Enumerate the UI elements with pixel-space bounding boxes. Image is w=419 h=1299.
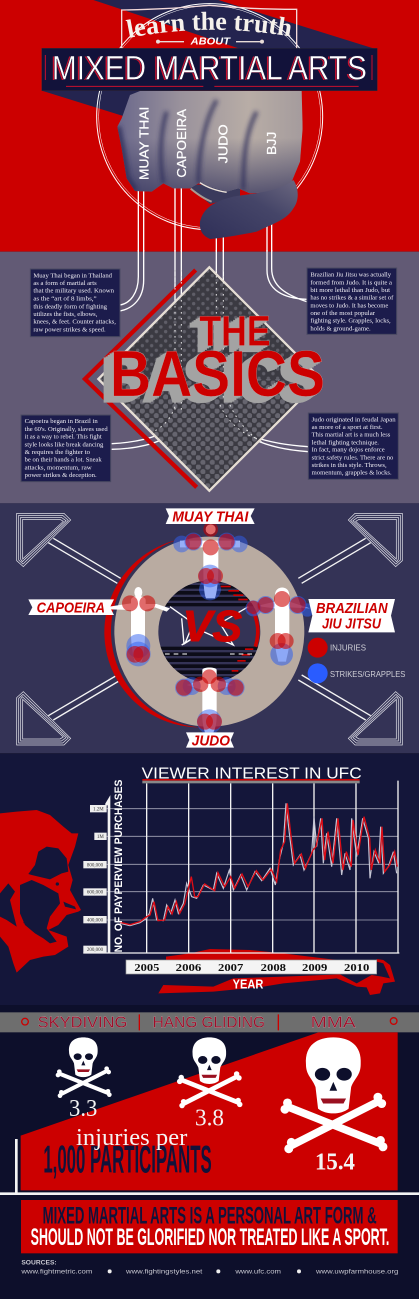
- label: brazilian jiu jitsu: JIU JITSU: [322, 617, 381, 633]
- tagline: learn the truth: [126, 12, 290, 38]
- text block: brazilian jiu jitsu: Brazilian Jiu Jitsu was actually: [310, 272, 392, 279]
- text block: brazilian jiu jitsu: has no strikes & a similar set of: [310, 295, 394, 302]
- x axis years: 2009: [302, 963, 327, 974]
- y axis ticks: 1.2M: [93, 807, 104, 812]
- red streak: [158, 949, 395, 995]
- sources: www.ufc.com: [234, 1269, 281, 1276]
- values: 3.8: [195, 1106, 224, 1132]
- diagonal navy band: [42, 0, 377, 132]
- heading: the: THE: [199, 307, 271, 355]
- sources: www.fightingstyles.net: [125, 1269, 203, 1276]
- knuckle labels: JUDO: [216, 124, 230, 163]
- text block: capoeira: Capoeira began in Brazil in: [25, 418, 99, 425]
- heading: basics: BASICS: [110, 337, 325, 410]
- caption: injuries per: [76, 1124, 187, 1151]
- y axis ticks: 800,000: [87, 863, 104, 868]
- sources: [20, 1259, 399, 1276]
- panel: viewer interest chart: [0, 754, 419, 1006]
- y axis ticks: [83, 805, 107, 953]
- x axis years: 2008: [261, 963, 286, 974]
- text block: brazilian jiu jitsu: moves to Judo. It has become: [310, 302, 389, 309]
- values: [69, 1096, 355, 1175]
- halftone diamond: [98, 267, 321, 491]
- x axis years: 2010: [344, 963, 369, 974]
- about label: [156, 37, 264, 48]
- title banner: MIXED MARTIAL ARTS: [50, 50, 365, 88]
- red chevron: [85, 270, 197, 487]
- text block: muay thai: utilizes the fists, elbows,: [33, 311, 98, 318]
- x axis years: 2005: [134, 963, 159, 974]
- chart title: VIEWER INTEREST IN UFC: [142, 765, 362, 782]
- sources: SOURCES:: [21, 1259, 57, 1266]
- text block: judo: In fact, many dojos enforce: [312, 447, 385, 454]
- text block: capoeira: style looks like break dancing: [25, 441, 104, 448]
- icon: skull mma: [280, 1037, 387, 1153]
- about label: ABOUT: [190, 37, 231, 48]
- icon: skull hang gliding: [177, 1037, 242, 1108]
- text block: capoeira: power strikes & deception.: [25, 472, 97, 479]
- activity band: HANG GLIDING: [153, 1015, 265, 1032]
- text block: muay thai: as a form of martial arts: [33, 280, 97, 287]
- panel: injury comparison: [0, 1005, 419, 1299]
- text block: capoeira: it as a way to rebel. This fight: [25, 434, 102, 441]
- label: brazilian jiu jitsu: BRAZILIAN: [316, 601, 388, 617]
- caption: [43, 1124, 212, 1182]
- panel: header: [0, 0, 419, 252]
- text block: muay thai: raw power strikes & speed.: [33, 326, 106, 333]
- figure: muay thai: [173, 522, 248, 600]
- label: judo: JUDO: [192, 733, 230, 750]
- line chart: [83, 781, 399, 953]
- text block: judo: strict safety rules. There are no: [312, 454, 393, 461]
- text block: muay thai: [30, 269, 120, 337]
- text block: capoeira: attacks, momentum, raw: [25, 464, 92, 471]
- panel: versus: [0, 503, 419, 753]
- text block: judo: strikes in this style. Throws,: [312, 462, 387, 469]
- text block: capoeira: & requires the fighter to: [25, 449, 90, 456]
- y axis label: NO. OF PAYPERVIEW PURCHASES: [113, 780, 125, 952]
- icon: red head silhouette: [0, 810, 81, 973]
- legend: INJURIES: [330, 643, 366, 653]
- text block: capoeira: be on their hands a lot. Sneak: [25, 457, 103, 464]
- vs: VS: [183, 602, 242, 651]
- legend: [308, 638, 406, 683]
- text block: muay thai: knees, & feet. Counter attacks,: [33, 319, 116, 326]
- x axis years: [126, 960, 377, 974]
- figure: capoeira: [109, 587, 170, 666]
- text block: judo: This martial art is a much less: [312, 432, 391, 439]
- knuckle labels: BJJ: [265, 132, 279, 155]
- legend: STRIKES/GRAPPLES: [330, 669, 406, 679]
- corner arrows: [17, 513, 402, 745]
- figure: judo: [175, 667, 245, 734]
- text block: judo: [308, 413, 398, 479]
- panel: the basics: [0, 250, 419, 503]
- text block: capoeira: [21, 415, 111, 482]
- x axis label: YEAR: [233, 977, 263, 991]
- connector lines behind diamond: [112, 250, 308, 452]
- axis strokes: [0, 1139, 419, 1194]
- label: muay thai: MUAY THAI: [172, 509, 249, 526]
- sources: www.fightmetric.com: [20, 1269, 92, 1276]
- text block: judo: as more of a sport at first.: [312, 424, 383, 431]
- knuckle labels: [137, 107, 279, 180]
- activity band: MMA: [311, 1015, 357, 1032]
- icon: skull skydiving: [56, 1037, 112, 1098]
- activity band: [0, 1012, 419, 1032]
- title banner: MIXED MARTIAL ARTS: [52, 49, 367, 87]
- x axis years: 2006: [176, 963, 201, 974]
- text block: brazilian jiu jitsu: holds & ground-game.: [310, 325, 371, 332]
- x axis years: 2007: [218, 963, 243, 974]
- text block: brazilian jiu jitsu: fighting style. Grapples, locks,: [310, 318, 391, 325]
- y axis ticks: 400,000: [87, 918, 104, 923]
- values: 3.3: [69, 1096, 97, 1122]
- frame around tagline: [122, 5, 297, 48]
- values: 15.4: [315, 1149, 355, 1175]
- icon: fist: [113, 88, 307, 239]
- text block: muay thai: Muay Thai began in Thailand: [33, 272, 113, 279]
- text block: brazilian jiu jitsu: [307, 268, 397, 334]
- conclusion banner: [21, 1200, 398, 1253]
- ring: [104, 535, 304, 728]
- text block: muay thai: as the “art of 8 limbs,”: [33, 296, 97, 303]
- sources: www.uwpfarmhouse.org: [315, 1269, 399, 1276]
- knuckle labels: CAPOEIRA: [175, 108, 189, 178]
- y axis ticks: 600,000: [87, 891, 104, 896]
- ring interior stripes and figures: [157, 579, 263, 679]
- knuckle labels: MUAY THAI: [137, 107, 151, 180]
- text block: brazilian jiu jitsu: formed from Judo. It is quite a: [310, 279, 392, 286]
- text block: judo: lethal fighting technique.: [312, 439, 379, 446]
- y axis ticks: 200,000: [87, 948, 104, 953]
- figure: brazilian jiu jitsu: [245, 587, 314, 666]
- text block: capoeira: the 60's. Originally, slaves used: [25, 426, 109, 433]
- y axis ticks: 1M: [97, 835, 104, 840]
- text block: brazilian jiu jitsu: bit more lethal than Judo, but: [310, 287, 390, 294]
- text block: brazilian jiu jitsu: one of the most popular: [310, 310, 376, 317]
- text block: judo: Judo originated in feudal Japan: [312, 416, 397, 423]
- text block: muay thai: this deadly form of fighting: [33, 303, 108, 310]
- activity band: SKYDIVING: [38, 1015, 127, 1032]
- text block: judo: momentum, grapples & locks.: [312, 470, 392, 477]
- label: brazilian jiu jitsu: [308, 599, 395, 633]
- ring and lines behind the fist: [97, 4, 323, 252]
- red wedge: [21, 1032, 398, 1190]
- label: capoeira: CAPOEIRA: [37, 600, 105, 616]
- dotted lines over diamond: [152, 270, 263, 443]
- text block: muay thai: that the military used. Known: [33, 288, 115, 295]
